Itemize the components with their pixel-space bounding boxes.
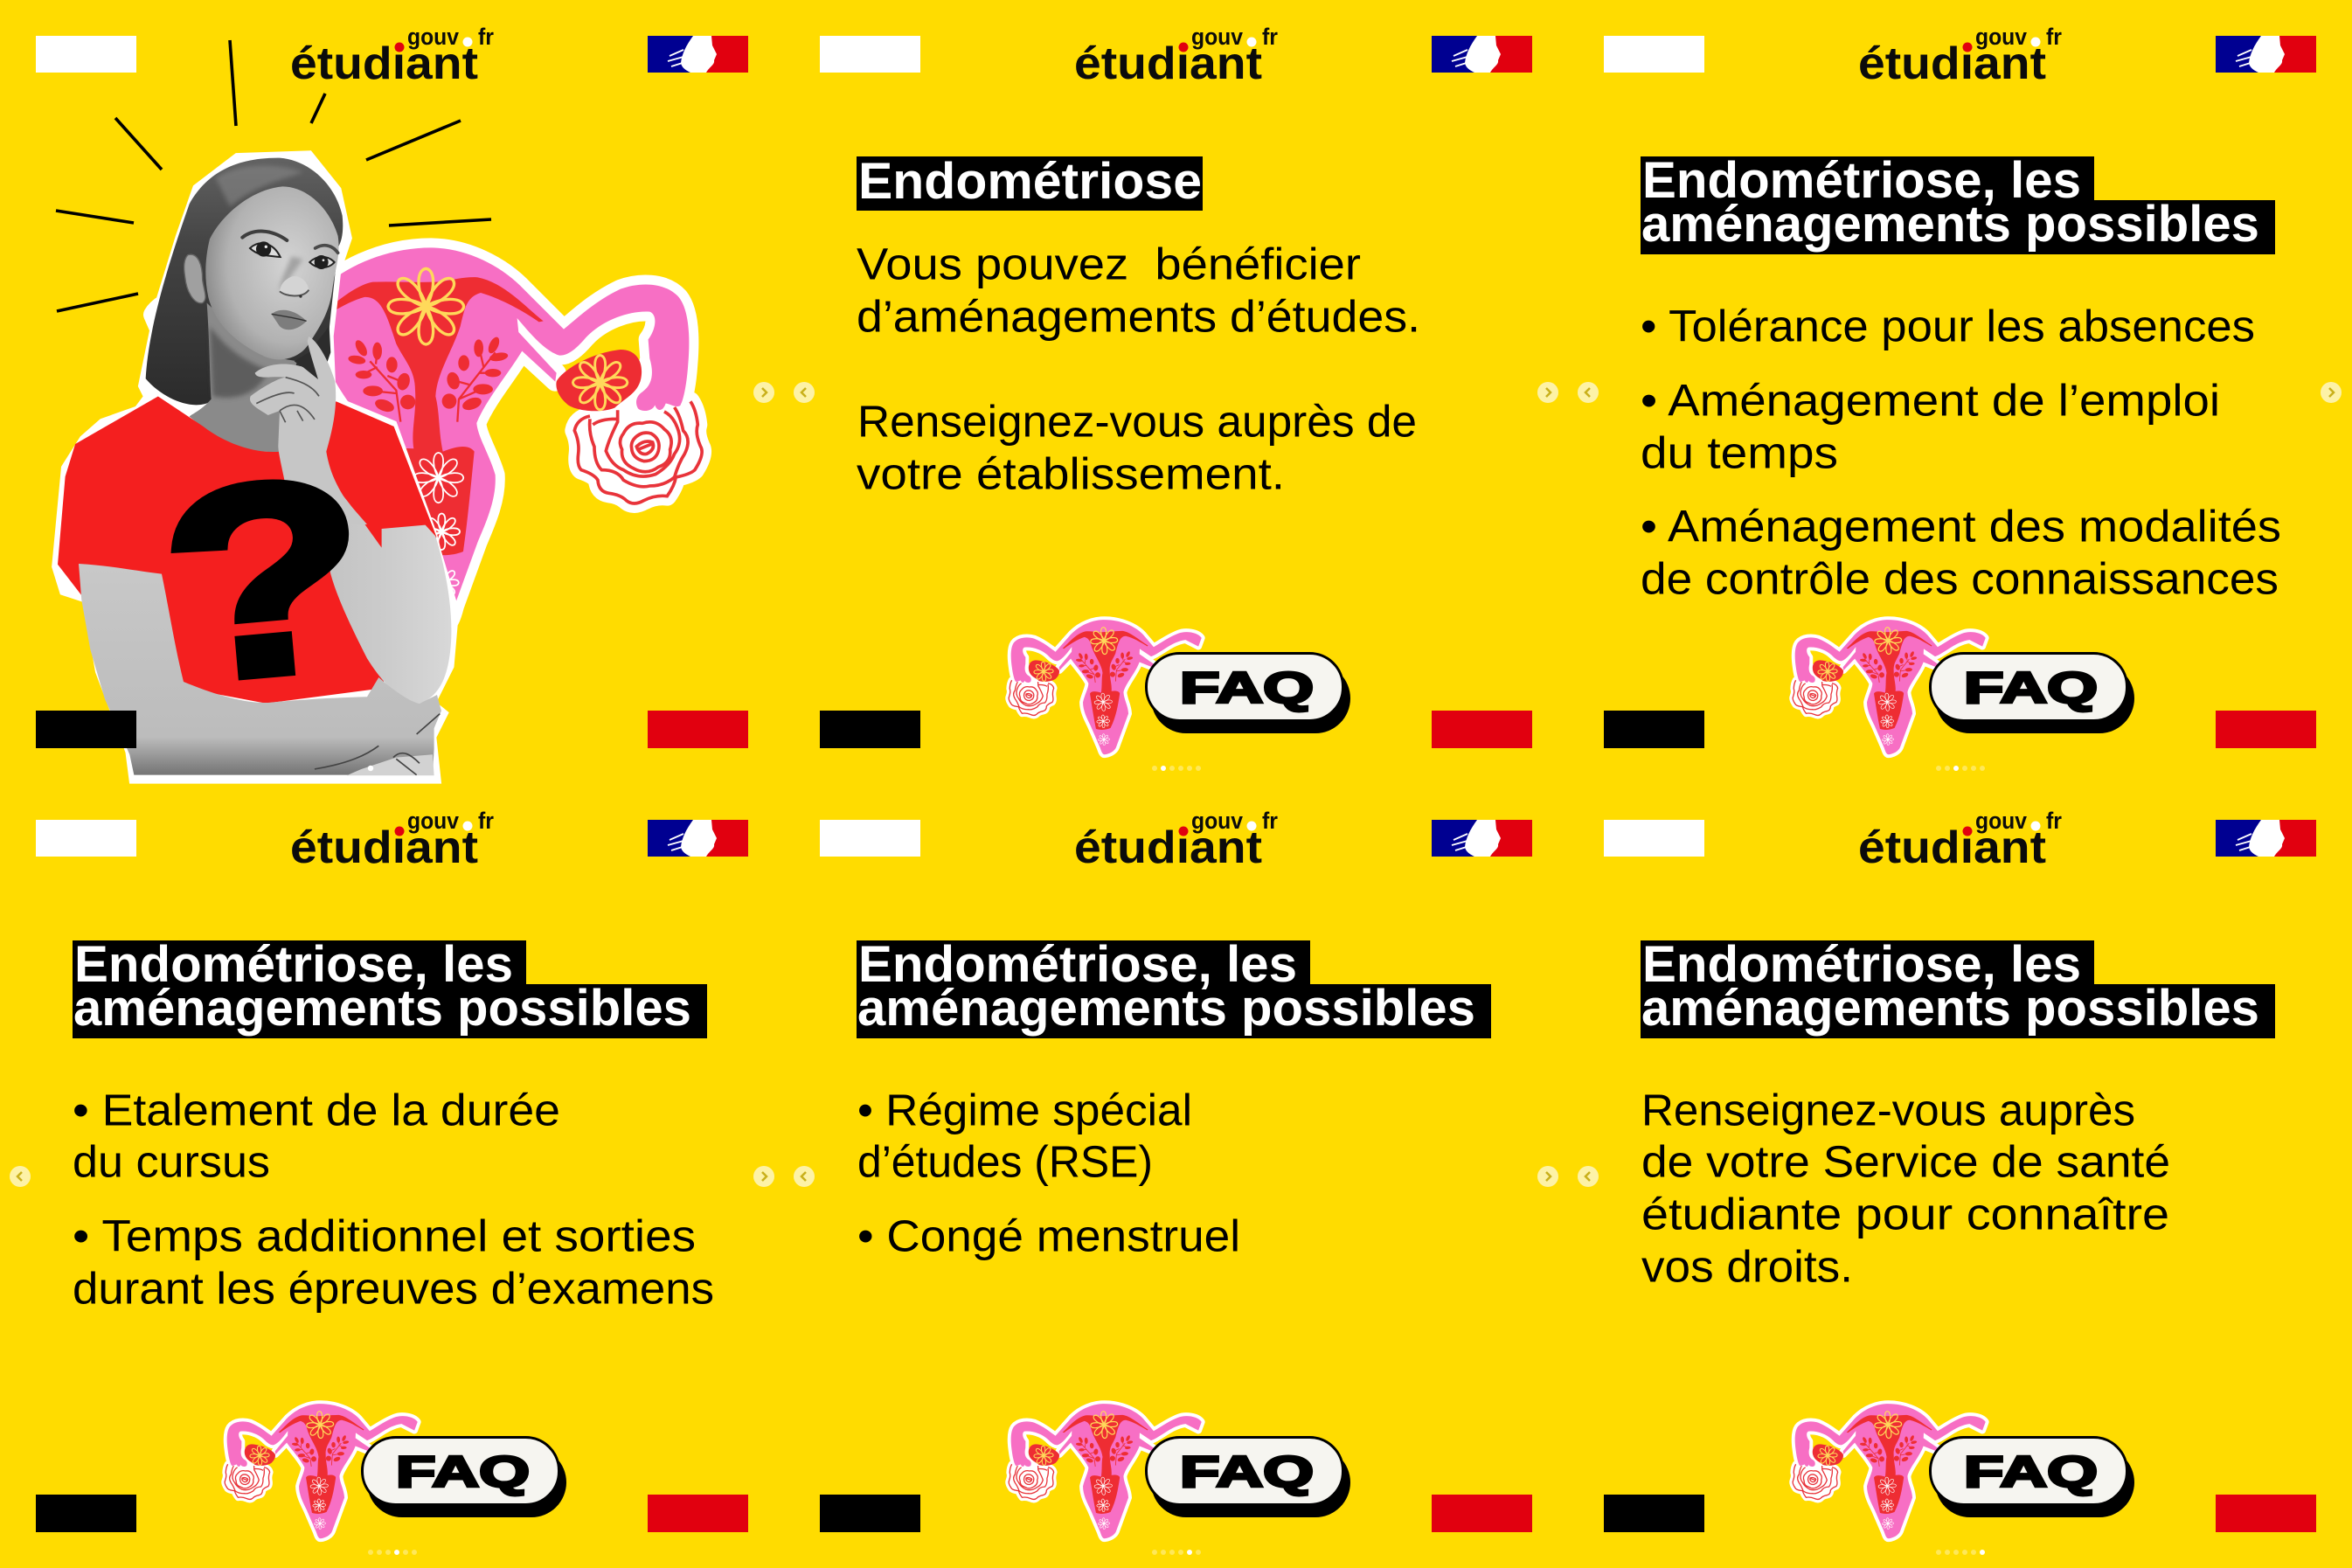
heading <box>857 936 1491 1038</box>
logo: gouv <box>1191 24 1243 50</box>
panel 5: aménagements 3 <box>794 808 1558 1555</box>
FAQ badge: FAQ <box>396 1447 530 1496</box>
red bar <box>648 1495 748 1532</box>
previous arrow <box>1578 1166 1599 1187</box>
FAQ badge: FAQ <box>1180 1447 1314 1496</box>
hand under chin <box>250 336 367 524</box>
black bar <box>820 711 920 748</box>
heading <box>1641 936 2275 1038</box>
heading: Endométriose, les <box>74 936 513 993</box>
panel 6: service de santé <box>1578 808 2316 1555</box>
next arrow <box>753 382 774 403</box>
heading: aménagements possibles <box>73 980 691 1037</box>
body text: Renseignez-vous auprès <box>1641 1086 2135 1134</box>
panel 3: aménagements 1 <box>1578 24 2342 771</box>
body text: durant les épreuves d’examens <box>73 1264 714 1313</box>
panel 2: Vous pouvez <box>794 24 1558 771</box>
uterus sticker <box>220 1398 424 1544</box>
logo: étudiant <box>1074 38 1262 89</box>
white bar <box>1604 36 1704 73</box>
heading: Endométriose, les <box>858 936 1297 993</box>
flag <box>648 36 748 73</box>
FAQ badge <box>362 1437 566 1517</box>
body text: • Congé menstruel <box>857 1211 1240 1260</box>
FAQ badge <box>1930 654 2134 733</box>
flag <box>1432 36 1532 73</box>
logo: gouv <box>407 24 459 50</box>
white bar <box>820 820 920 857</box>
black bar <box>1604 1495 1704 1532</box>
black bar <box>820 1495 920 1532</box>
logo <box>1858 24 2062 89</box>
logo: gouv <box>1191 808 1243 834</box>
panel 4: aménagements 2 <box>10 808 774 1555</box>
previous arrow <box>794 382 815 403</box>
pagination dots <box>1152 1550 1201 1555</box>
next arrow <box>2321 382 2342 403</box>
heading <box>1641 152 2275 254</box>
white cut-out outline <box>52 150 459 784</box>
flag <box>648 820 748 857</box>
pagination dots <box>368 1550 417 1555</box>
body text: votre établissement. <box>857 449 1285 498</box>
body text <box>1641 301 2281 603</box>
rays <box>56 40 491 311</box>
red bar <box>2216 1495 2316 1532</box>
red bar <box>648 711 748 748</box>
body text: • Etalement de la durée <box>73 1086 560 1134</box>
head and hair <box>146 158 343 453</box>
logo: fr <box>478 24 494 50</box>
body text: étudiante pour connaître <box>1641 1189 2169 1239</box>
logo <box>1074 24 1278 89</box>
previous arrow <box>794 1166 815 1187</box>
body text: • Régime spécial <box>857 1086 1192 1134</box>
body text: • Temps additionnel et sorties <box>73 1211 696 1260</box>
logo <box>290 24 494 89</box>
previous arrow <box>10 1166 31 1187</box>
logo <box>1858 808 2062 873</box>
previous arrow <box>1578 382 1599 403</box>
logo <box>1074 808 1278 873</box>
black bar <box>36 1495 136 1532</box>
logo: étudiant <box>290 38 478 89</box>
white bar <box>36 820 136 857</box>
white bar <box>36 36 136 73</box>
body text: • Tolérance pour les absences <box>1641 301 2255 351</box>
body text: vos droits. <box>1641 1241 1853 1292</box>
pagination dots <box>1936 1550 1985 1555</box>
body text: Vous pouvez bénéficier <box>857 239 1361 288</box>
pagination dots <box>368 766 373 771</box>
heading: Endométriose, les <box>1642 936 2081 993</box>
body text: de contrôle des connaissances <box>1641 554 2279 603</box>
flag <box>1432 820 1532 857</box>
heading: aménagements possibles <box>1641 980 2259 1037</box>
next arrow <box>1537 382 1558 403</box>
body text: du temps <box>1641 428 1838 477</box>
woman with question mark <box>52 150 459 784</box>
white bar <box>820 36 920 73</box>
black bar <box>1604 711 1704 748</box>
heading: aménagements possibles <box>1641 196 2259 253</box>
body text: d’aménagements d’études. <box>857 292 1420 341</box>
question mark: ? <box>152 420 379 739</box>
FAQ badge <box>1147 654 1350 733</box>
body text <box>857 239 1420 498</box>
logo: étudiant <box>1858 822 2046 873</box>
next arrow <box>753 1166 774 1187</box>
logo: fr <box>1262 808 1278 834</box>
black bar <box>36 711 136 748</box>
uterus sticker <box>1788 1398 1992 1544</box>
FAQ badge <box>1147 1437 1350 1517</box>
heading: aménagements possibles <box>857 980 1475 1037</box>
logo: fr <box>478 808 494 834</box>
body text: d’études (RSE) <box>857 1136 1153 1187</box>
red bar <box>2216 711 2316 748</box>
panel 1: header and footer <box>36 24 774 771</box>
heading: Endométriose <box>858 153 1202 210</box>
folded arm <box>79 564 441 775</box>
logo: étudiant <box>1858 38 2046 89</box>
FAQ badge: FAQ <box>1964 1447 2098 1496</box>
body text <box>73 1086 714 1313</box>
logo: fr <box>1262 24 1278 50</box>
logo <box>290 808 494 873</box>
pagination dots <box>1936 766 1985 771</box>
red bar <box>1432 711 1532 748</box>
uterus sticker <box>1788 614 1992 760</box>
body text: • Aménagement des modalités <box>1641 502 2281 551</box>
logo: fr <box>2046 808 2062 834</box>
next arrow <box>1537 1166 1558 1187</box>
red bar <box>1432 1495 1532 1532</box>
logo: fr <box>2046 24 2062 50</box>
logo: gouv <box>407 808 459 834</box>
logo: étudiant <box>290 822 478 873</box>
uterus sticker <box>1004 1398 1208 1544</box>
red t-shirt <box>58 396 436 704</box>
heading <box>73 936 707 1038</box>
uterus sticker <box>1004 614 1208 760</box>
pagination dots <box>1152 766 1201 771</box>
white bar <box>1604 820 1704 857</box>
FAQ badge: FAQ <box>1180 663 1314 712</box>
large uterus sticker <box>153 247 702 625</box>
logo: gouv <box>1975 808 2027 834</box>
body text <box>1641 1086 2170 1292</box>
logo: étudiant <box>1074 822 1262 873</box>
flag <box>2216 820 2316 857</box>
FAQ badge <box>1930 1437 2134 1517</box>
raised arm <box>282 466 451 704</box>
panel 1: illustration <box>52 40 702 784</box>
body text: de votre Service de santé <box>1641 1136 2170 1187</box>
body text <box>857 1086 1240 1260</box>
body text: du cursus <box>73 1136 270 1187</box>
logo: gouv <box>1975 24 2027 50</box>
flag <box>2216 36 2316 73</box>
body text: • Aménagement de l’emploi <box>1641 376 2220 425</box>
FAQ badge: FAQ <box>1964 663 2098 712</box>
body text: Renseignez-vous auprès de <box>857 397 1417 446</box>
heading: Endométriose, les <box>1642 152 2081 209</box>
